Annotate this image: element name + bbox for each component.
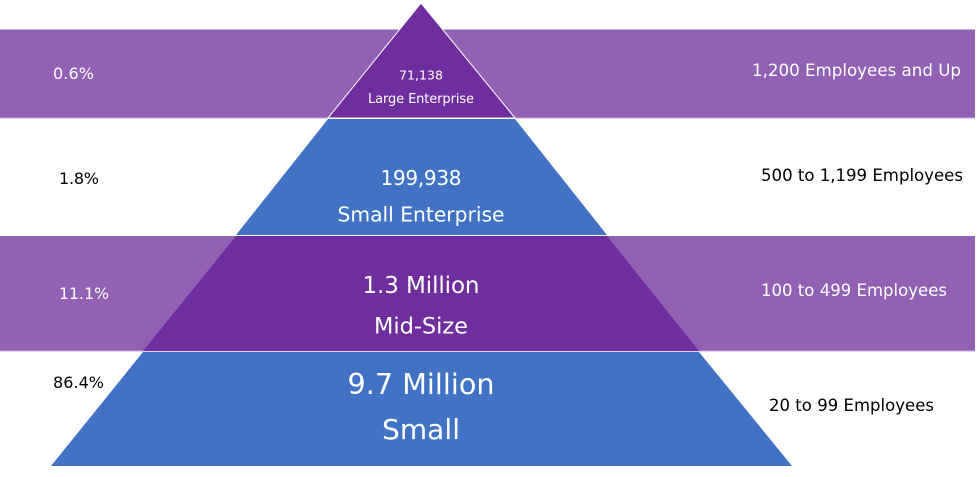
employee range: 20 to 99: 20 to 99 Employees — [769, 396, 934, 415]
tier value: 1.3 Million: 1.3 Million — [362, 273, 480, 299]
tier value: 9.7 Million: 9.7 Million — [348, 367, 494, 401]
pyramid tier: small — [51, 352, 792, 466]
band: top purple row — [0, 30, 975, 118]
percentage: 86.4%: 86.4% — [53, 373, 104, 392]
employee range: 500 to 1,199: 500 to 1,199 Employees — [761, 166, 963, 185]
employee range: 100 to 499: 100 to 499 Employees — [761, 281, 947, 300]
percentage: 0.6%: 0.6% — [53, 64, 94, 83]
band: third purple row — [0, 236, 975, 351]
percentage: 11.1%: 11.1% — [59, 284, 109, 303]
tier label: Small: Small — [382, 413, 460, 446]
tier value: 199,938: 199,938 — [380, 166, 462, 190]
tier label: Large Enterprise: Large Enterprise — [368, 92, 474, 107]
tier label: Small Enterprise: Small Enterprise — [338, 202, 504, 226]
pyramid tier: small enterprise — [236, 119, 607, 235]
tier value: 71,138: 71,138 — [399, 68, 443, 82]
tier label: Mid-Size: Mid-Size — [374, 314, 468, 340]
pyramid tier: mid-size — [143, 236, 699, 351]
employee range: 1,200 and up: 1,200 Employees and Up — [752, 60, 961, 80]
percentage: 1.8%: 1.8% — [59, 169, 99, 188]
pyramid tier: large enterprise — [328, 3, 515, 118]
